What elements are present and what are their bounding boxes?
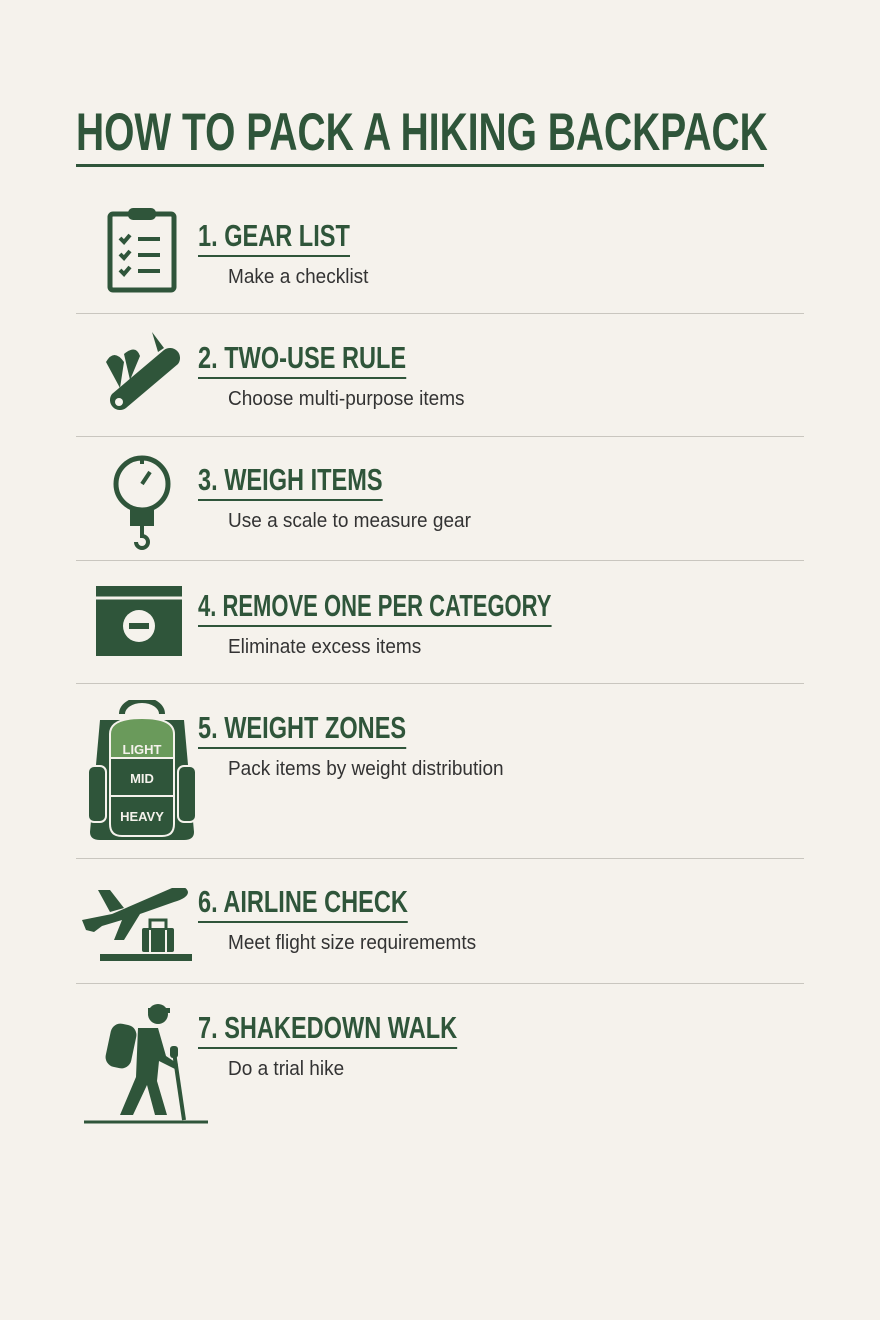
subtitle 2: Choose multi-purpose items <box>228 388 465 410</box>
subtitle 4: Eliminate excess items <box>228 636 421 658</box>
subtitle 3: Use a scale to measure gear <box>228 510 471 532</box>
icon: backpack zones: LIGHT <box>122 742 162 757</box>
icon: backpack zones: MID <box>130 771 154 786</box>
icon: backpack zones: HEAVY <box>120 809 164 824</box>
heading 7: 7. SHAKEDOWN WALK <box>198 1010 457 1045</box>
heading 6: 6. AIRLINE CHECK <box>198 884 408 919</box>
heading 3: 3. WEIGH ITEMS <box>198 462 383 497</box>
icon: plane and luggage <box>82 888 192 961</box>
icon: box minus <box>96 586 182 656</box>
heading 2: 2. TWO-USE RULE <box>198 340 406 375</box>
step 7 <box>84 1004 458 1124</box>
step 5 <box>89 700 504 840</box>
icon: multitool <box>106 332 180 410</box>
heading 5: 5. WEIGHT ZONES <box>198 710 406 745</box>
icon: scale <box>114 456 170 550</box>
heading 1: 1. GEAR LIST <box>198 218 350 253</box>
subtitle 5: Pack items by weight distribution <box>228 758 504 780</box>
step 2 <box>106 332 465 410</box>
icon: backpack zones <box>89 700 195 840</box>
step 1 <box>108 208 368 292</box>
step 4 <box>96 586 552 658</box>
title: HOW TO PACK A HIKING BACKPACK <box>76 103 768 162</box>
icon: clipboard <box>108 208 176 292</box>
heading 4: 4. REMOVE ONE PER CATEGORY <box>198 588 551 623</box>
subtitle 6: Meet flight size requirememts <box>228 932 476 954</box>
subtitle 1: Make a checklist <box>228 266 368 288</box>
icon: hiker <box>84 1004 208 1124</box>
subtitle 7: Do a trial hike <box>228 1058 344 1080</box>
step 6 <box>82 884 476 961</box>
step 3 <box>114 456 471 550</box>
